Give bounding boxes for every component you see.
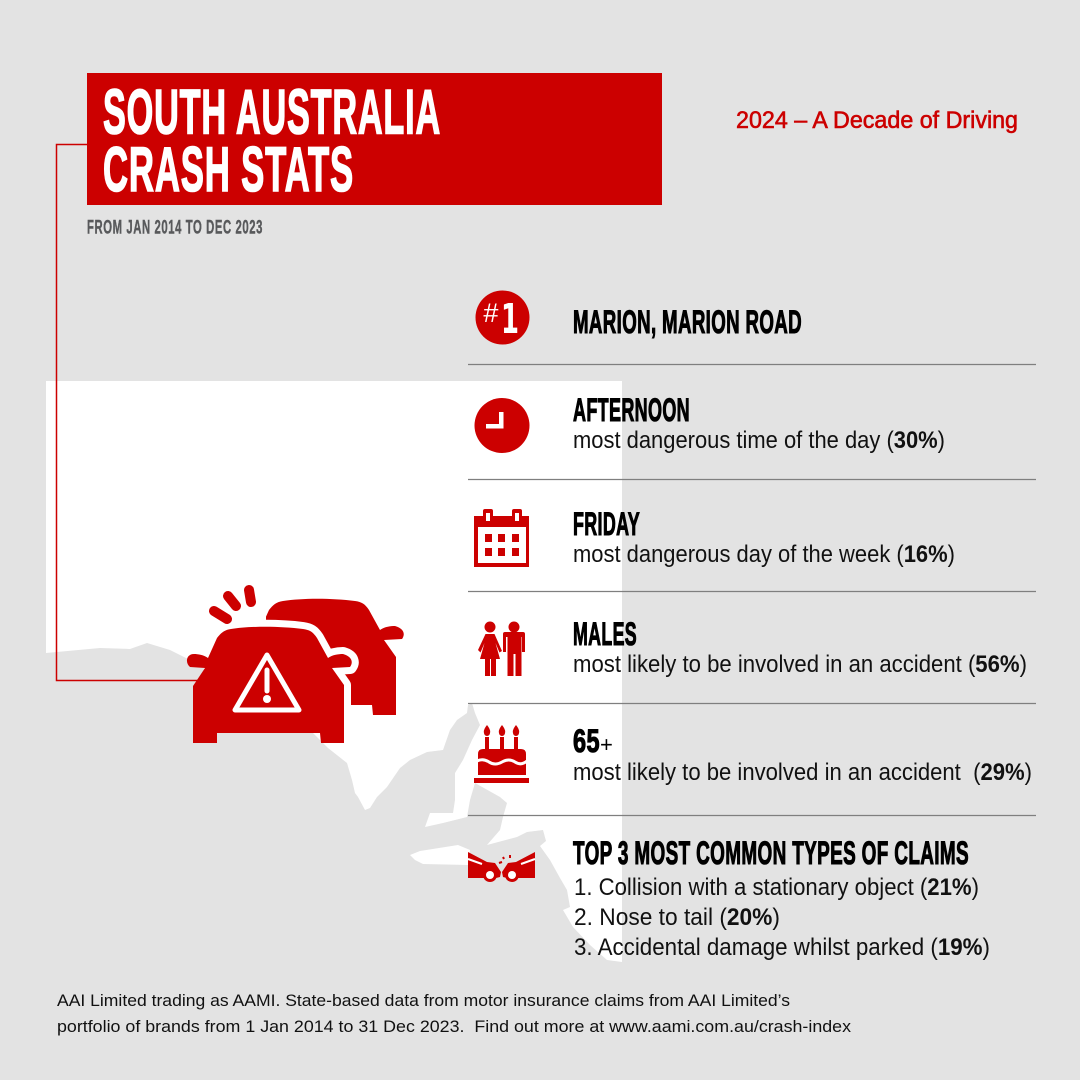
title banner: SOUTH AUSTRALIA xyxy=(103,78,441,148)
icon: crashed cars with warning sign xyxy=(187,590,404,743)
description: most likely to be involved in an accident (29%) xyxy=(573,759,1032,786)
title banner: CRASH STATS xyxy=(103,135,354,205)
tagline: 2024 – A Decade of Driving xyxy=(736,107,1018,134)
icon: number one badge xyxy=(476,290,530,344)
footer disclaimer: portfolio of brands from 1 Jan 2014 to 31 Dec 2023. Find out more at www.aami.com.au/crash-index xyxy=(57,1017,852,1036)
heading: MALES xyxy=(573,616,637,652)
row: top location xyxy=(476,290,802,344)
connector line xyxy=(56,144,200,680)
icon: clock xyxy=(474,398,530,453)
heading: 65 xyxy=(573,723,600,759)
footer disclaimer: AAI Limited trading as AAMI. State-based data from motor insurance claims from AAI Limited’s xyxy=(57,991,790,1010)
list item 2: 2. Nose to tail (20%) xyxy=(574,904,780,931)
row: gender xyxy=(478,616,1027,678)
plus sign: + xyxy=(600,732,613,757)
icon: number one badge: # xyxy=(483,298,499,328)
icon: number one badge: 1 xyxy=(501,295,519,343)
description: most dangerous day of the week (16%) xyxy=(573,541,955,568)
list item 3: 3. Accidental damage whilst parked (19%) xyxy=(574,934,990,961)
row: time of day xyxy=(474,392,945,454)
row: claims xyxy=(468,835,990,961)
icon: two cars colliding xyxy=(468,852,535,882)
heading: AFTERNOON xyxy=(573,392,690,428)
icon: woman and man xyxy=(478,622,525,676)
description: most dangerous time of the day (30%) xyxy=(573,427,945,454)
title banner xyxy=(87,73,662,205)
dividers xyxy=(468,364,1036,816)
icon: calendar xyxy=(474,509,529,567)
row: age group xyxy=(474,723,1032,786)
footer disclaimer xyxy=(57,991,852,1036)
heading: MARION, MARION ROAD xyxy=(573,304,802,340)
icon: birthday cake xyxy=(474,725,529,783)
row: day of week xyxy=(474,506,955,568)
heading: FRIDAY xyxy=(573,506,640,542)
subtitle: date range: FROM JAN 2014 TO DEC 2023 xyxy=(87,218,263,238)
list item 1: 1. Collision with a stationary object (21%) xyxy=(574,874,979,901)
map: South Australia landmass xyxy=(46,381,622,962)
description: most likely to be involved in an accident (56%) xyxy=(573,651,1027,678)
